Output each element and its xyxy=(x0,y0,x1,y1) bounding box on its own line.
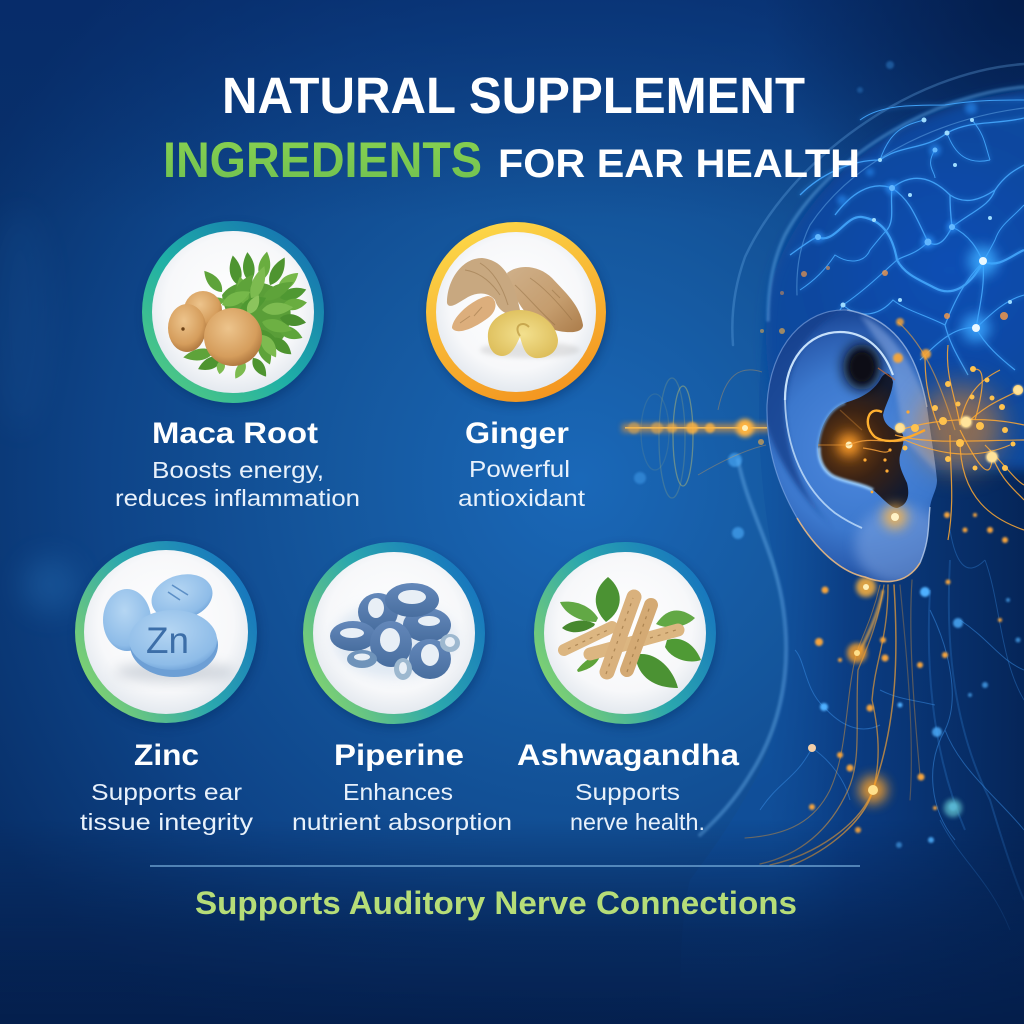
icon: zinc tablets xyxy=(75,541,259,727)
heading: ashwagandha: Ashwagandha xyxy=(517,739,739,772)
head silhouette with neck xyxy=(680,64,1024,1024)
divider xyxy=(150,865,860,867)
icon: zinc tablets: Zn xyxy=(146,620,189,661)
footer tagline: Supports Auditory Nerve Connections xyxy=(195,885,797,921)
title line 1: NATURAL SUPPLEMENT xyxy=(222,67,805,124)
title line 2: FOR EAR HEALTH xyxy=(498,142,860,186)
text: piperine benefit: nutrient absorption xyxy=(292,809,512,835)
orange nerve burst xyxy=(893,318,1024,540)
title line 2: INGREDIENTS xyxy=(163,132,482,188)
title line 2 xyxy=(163,132,860,188)
panel: ashwagandha xyxy=(517,542,739,835)
text: piperine benefit: Enhances xyxy=(343,779,453,805)
text: maca root benefit xyxy=(115,457,360,511)
ear cavity xyxy=(818,374,908,508)
panel: piperine xyxy=(292,542,512,835)
panel: maca root xyxy=(115,221,360,511)
icon: maca root xyxy=(142,221,326,407)
text: zinc benefit xyxy=(80,779,254,835)
heading: zinc: Zinc xyxy=(134,739,199,772)
panel: zinc xyxy=(75,541,259,835)
text: ginger benefit: Powerful xyxy=(469,456,570,482)
heading: piperine: Piperine xyxy=(334,739,464,772)
text: piperine benefit xyxy=(292,779,512,835)
ear highlights xyxy=(785,332,893,400)
heading: ginger: Ginger xyxy=(465,417,569,450)
sound waves and signal beam xyxy=(622,328,785,498)
text: maca root benefit: reduces inflammation xyxy=(115,485,360,511)
text: ashwagandha benefit: nerve health. xyxy=(570,809,705,835)
brain neural network xyxy=(780,100,1024,375)
text: ginger benefit xyxy=(458,456,586,511)
ear xyxy=(760,305,945,585)
heading: maca root: Maca Root xyxy=(152,417,318,450)
icon: piperine tablets xyxy=(303,542,487,728)
text: ashwagandha benefit xyxy=(570,779,705,835)
text: ashwagandha benefit: Supports xyxy=(575,779,680,805)
icon: ginger xyxy=(426,222,608,406)
bottom fade xyxy=(0,820,1024,1024)
panel: ginger xyxy=(426,222,608,511)
text: ginger benefit: antioxidant xyxy=(458,485,586,511)
text: zinc benefit: tissue integrity xyxy=(80,809,254,835)
orange nerve bundle down the neck xyxy=(745,577,920,866)
icon: ashwagandha roots xyxy=(534,542,718,728)
lower network dots xyxy=(634,453,1024,930)
text: zinc benefit: Supports ear xyxy=(91,779,242,805)
text: maca root benefit: Boosts energy, xyxy=(152,457,324,483)
